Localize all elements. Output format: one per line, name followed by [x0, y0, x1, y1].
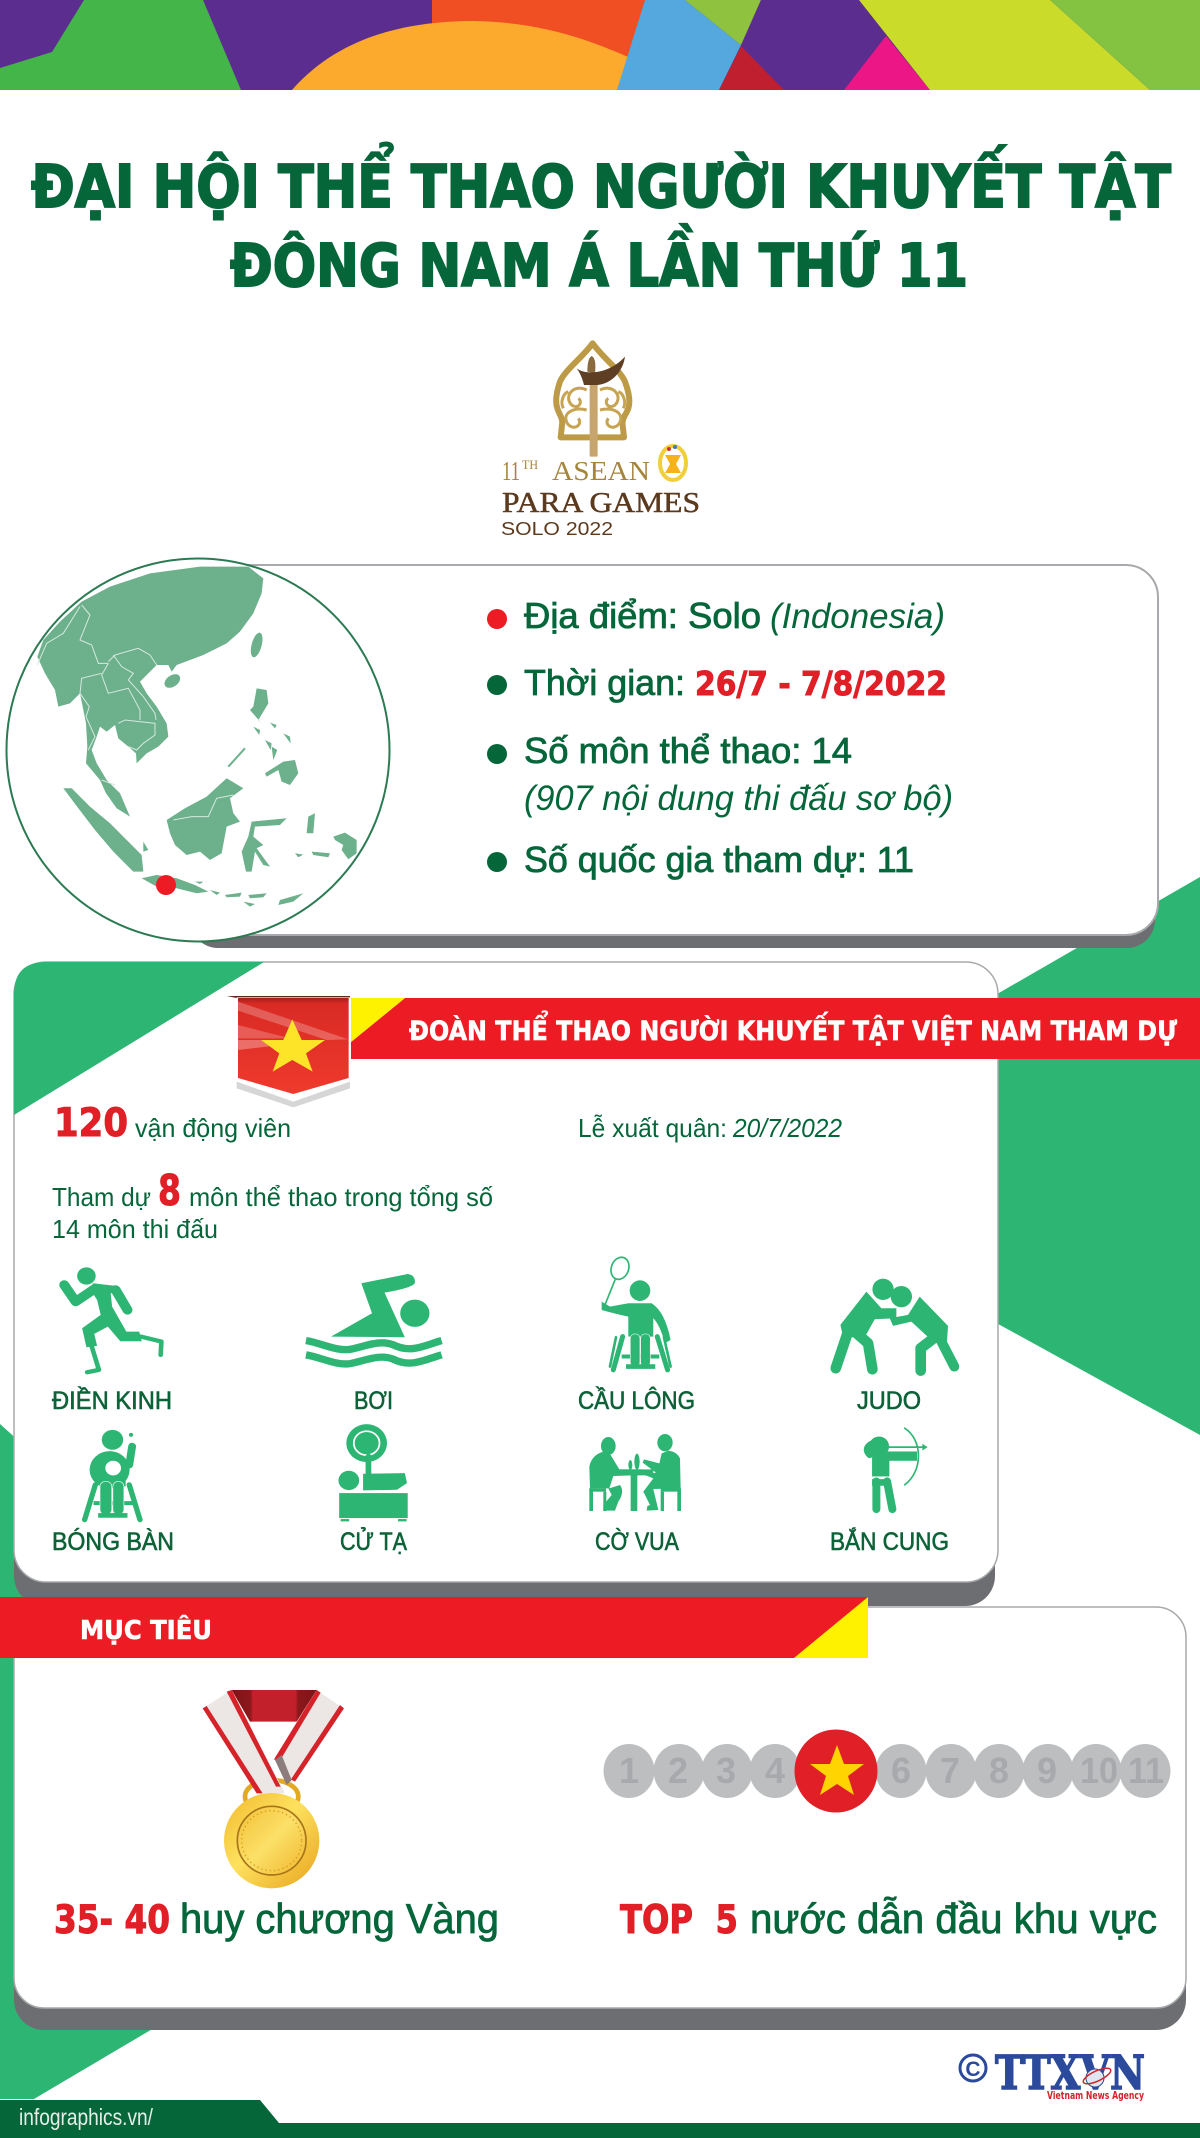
athletes stat [54, 1101, 291, 1146]
ranking row: 3 [716, 1750, 736, 1791]
icon: Vietnam flag ribbon [227, 996, 350, 1107]
ranking row: 10 [1080, 1750, 1118, 1791]
ranking row: 1 [619, 1750, 639, 1791]
send-off date [578, 1113, 843, 1143]
label: BƠI [354, 1387, 393, 1415]
marker: Solo [156, 875, 176, 895]
fact list: Thời gian: [524, 662, 685, 703]
medal target: huy chương Vàng [180, 1895, 499, 1942]
sports count: Tham dự [52, 1182, 151, 1212]
ranking row: 7 [940, 1750, 960, 1791]
medal target: 35- 40 [54, 1898, 170, 1943]
sports count: môn thể thao trong tổng số [189, 1182, 493, 1212]
logo: TTXVN: C [965, 2058, 981, 2081]
ranking row: 11 [1128, 1750, 1164, 1791]
icon: archery [867, 1428, 928, 1509]
title: ĐÔNG NAM Á LẦN THỨ 11 [230, 223, 968, 300]
label: CẦU LÔNG [578, 1386, 695, 1415]
panel: Vietnam delegation [14, 962, 1200, 1606]
fact list: Số môn thể thao: 14 [524, 730, 852, 771]
icon: athletics [64, 1267, 161, 1372]
panel: goals [0, 1597, 1186, 2030]
label: JUDO [857, 1387, 921, 1415]
medal target [54, 1895, 499, 1943]
fact list: Số quốc gia tham dự: 11 [524, 839, 914, 880]
icon: judo [836, 1279, 954, 1371]
label: BẮN CUNG [830, 1526, 949, 1556]
icon: swimming [306, 1274, 442, 1364]
goals banner: MỤC TIÊU [80, 1614, 212, 1646]
athletes stat: 120 [54, 1101, 128, 1146]
label: BÓNG BÀN [52, 1527, 174, 1556]
panel: event facts [6, 558, 1158, 948]
send-off date: 20/7/2022 [732, 1113, 843, 1143]
icon: chess [589, 1434, 681, 1511]
delegation banner [351, 998, 1200, 1059]
logo: ASEAN Para Games [501, 343, 700, 539]
logo: ASEAN Para Games: 11 [502, 456, 520, 486]
logo: TTXVN: TTXVN [995, 2046, 1145, 2101]
icon: weightlifting [338, 1424, 408, 1521]
sports count [52, 1166, 493, 1244]
logo: ASEAN Para Games: TH [522, 457, 538, 472]
sports count: 14 môn thi đấu [52, 1214, 218, 1244]
top colour band [0, 0, 1200, 90]
fact list [487, 595, 953, 880]
ranking row: 9 [1037, 1750, 1057, 1791]
footer bar: infographics.vn/ [19, 2104, 154, 2130]
map globe [6, 558, 390, 942]
ranking row: 8 [989, 1750, 1009, 1791]
sports count: 8 [158, 1166, 181, 1215]
footer bar [0, 2100, 1200, 2138]
title [31, 143, 1171, 300]
logo: ASEAN Para Games: ASEAN [552, 456, 650, 486]
ranking row: 6 [891, 1750, 911, 1791]
athletes stat: vận động viên [135, 1113, 291, 1143]
icon: badminton [602, 1255, 671, 1370]
logo: TTXVN: Vietnam News Agency [1047, 2089, 1144, 2102]
ranking row [604, 1730, 1170, 1812]
fact list: (Indonesia) [770, 597, 945, 636]
label: CỬ TẠ [340, 1526, 407, 1556]
logo: TTXVN [960, 2046, 1145, 2102]
fact list: 26/7 - 7/8/2022 [695, 664, 947, 703]
ranking row: 2 [668, 1750, 688, 1791]
label: CỜ VUA [595, 1527, 679, 1556]
ranking row: 4 [765, 1750, 785, 1791]
fact list: (907 nội dung thi đấu sơ bộ) [524, 779, 953, 818]
background green shapes [0, 877, 1200, 2099]
fact list: Địa điểm: Solo [524, 595, 761, 636]
logo: ASEAN Para Games: SOLO 2022 [501, 519, 613, 539]
send-off date: Lễ xuất quân: [578, 1113, 727, 1143]
label: ĐIỀN KINH [52, 1386, 172, 1415]
icon: gold medal [203, 1690, 344, 1888]
goals banner [0, 1597, 868, 1658]
icon: table tennis [85, 1430, 140, 1520]
ranking target: TOP 5 [620, 1898, 738, 1943]
ranking target: nước dẫn đầu khu vực [750, 1895, 1157, 1942]
logo: ASEAN Para Games: PARA GAMES [502, 487, 700, 519]
